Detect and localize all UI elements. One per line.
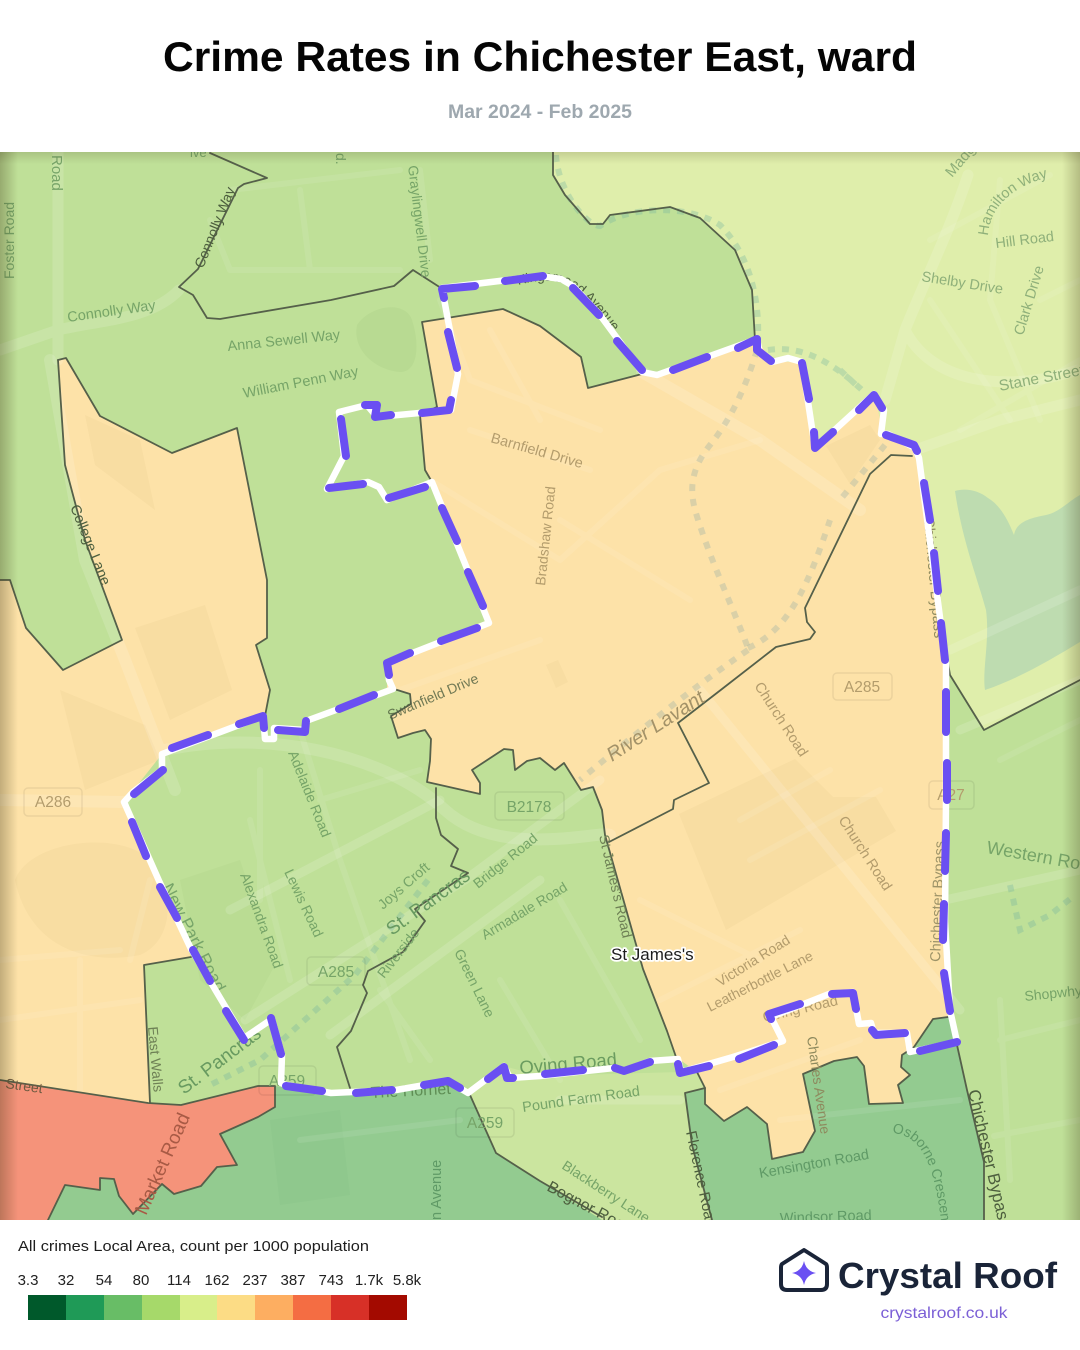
street labels: Chichester Bypass (964, 1088, 1014, 1230)
street labels: Kingsmead Avenue (518, 272, 618, 329)
subtitle: date range: Mar 2024 - Feb 2025 (448, 102, 632, 123)
website url: crystalroof.co.uk (880, 1305, 1009, 1322)
street labels: Alexandra Road (237, 871, 287, 970)
logo: Crystal Roof (781, 1250, 1058, 1322)
region: central and south-east orange area (387, 309, 948, 1159)
region: western orange area (0, 358, 270, 1103)
legend tick labels: 387 (280, 1272, 306, 1289)
street labels: Market Road (131, 1110, 195, 1218)
legend colour scale (28, 1295, 407, 1320)
region: south-central light green area (470, 1066, 712, 1220)
street labels: n Avenue (429, 1160, 445, 1220)
street labels: Connolly Way (66, 298, 157, 326)
street labels: Blackberry Lane (559, 1157, 653, 1226)
place label: St James's: St James's (611, 945, 694, 964)
icon: house with star (781, 1250, 827, 1290)
ward boundary: purple dashes (132, 276, 957, 1093)
road network (0, 152, 1080, 1100)
street labels: Clark Drive (1012, 264, 1048, 337)
street labels: d. (333, 153, 349, 165)
legend (18, 1238, 422, 1320)
street labels: Windsor Road (780, 1208, 872, 1227)
street labels: Shelby Drive (920, 269, 1004, 298)
dotted footpaths (210, 155, 1075, 1085)
road number shields (24, 673, 974, 1137)
road number shields: A259 (467, 1115, 503, 1132)
region: dark green south-east area (685, 1017, 984, 1220)
street labels: Swanfield Drive (385, 670, 481, 723)
legend tick labels: 3.3 (18, 1272, 38, 1289)
road number shields: A285 (844, 679, 880, 696)
street labels: Florence Road (682, 1129, 719, 1229)
legend tick labels: 237 (242, 1272, 268, 1289)
legend tick labels: 1.7k (355, 1272, 384, 1289)
street labels: Riverside (374, 925, 422, 981)
street labels: Oving Road (519, 1049, 618, 1078)
street labels: St. Pancras (174, 1023, 265, 1099)
road number shields: B2178 (507, 799, 551, 816)
legend tick labels: 743 (318, 1272, 344, 1289)
street labels: Pound Farm Road (521, 1084, 641, 1116)
legend tick labels: 114 (167, 1272, 191, 1289)
street labels: Oving Road (761, 993, 840, 1026)
street labels: Joys Croft (374, 859, 433, 912)
street labels: Armadale Road (478, 879, 570, 943)
street labels: Foster Road (1, 202, 17, 279)
region: red high-crime area (0, 1080, 275, 1220)
street labels: Green Lane (451, 946, 498, 1020)
map edge vignette (0, 152, 1080, 1220)
legend tick labels: 5.8k (393, 1272, 422, 1289)
street labels: Charles Avenue (804, 1035, 834, 1135)
street labels: Adelaide Road (285, 748, 334, 839)
region boundary lines (0, 152, 1080, 1220)
street labels: Leatherbottle Lane (704, 947, 816, 1015)
street labels: Connolly Way (191, 185, 238, 270)
street labels: Bridge Road (470, 830, 540, 891)
street labels: College Lane (66, 503, 113, 588)
street labels: Lewis Road (281, 867, 327, 940)
street labels: East Walls (145, 1026, 167, 1093)
street labels: New Park Road (158, 880, 229, 995)
street labels: The Hornet (370, 1081, 452, 1102)
ward boundary: white underlay (124, 276, 957, 1093)
legend tick labels: 54 (96, 1272, 112, 1289)
logo wordmark: Crystal Roof (838, 1255, 1058, 1296)
street labels: Chichester Bypass (928, 841, 948, 962)
street labels: Madgwick Lane (942, 90, 1022, 181)
street labels: ive (190, 145, 207, 160)
legend title: All crimes Local Area, count per 1000 population (18, 1238, 369, 1255)
road number shields: A285 (318, 964, 354, 981)
street labels: Bognor Road (544, 1179, 635, 1238)
street labels: Chichester Bypass (920, 517, 946, 639)
street labels: Hill Road (995, 229, 1055, 252)
street labels: Victoria Road (713, 932, 793, 990)
lake (955, 490, 1080, 690)
street labels: Graylingwell Drive (405, 164, 435, 279)
street labels: River Lavant (603, 686, 710, 766)
street labels: Hamilton Way (978, 170, 1046, 235)
street labels: Church Road (751, 679, 811, 760)
road number shields: A286 (35, 794, 71, 811)
street labels: Kensington Road (758, 1147, 870, 1182)
legend tick labels: 32 (58, 1272, 74, 1289)
building and park patches (15, 307, 896, 1205)
street labels: Barnfield Drive (489, 430, 585, 472)
road number shields: A259 (269, 1073, 305, 1090)
street labels: Osborne Crescent (894, 1124, 948, 1220)
street labels: Anna Sewell Way (227, 327, 342, 355)
street labels: Church Road (835, 813, 895, 894)
street labels: William Penn Way (242, 364, 360, 402)
legend tick labels: 80 (133, 1272, 149, 1289)
street labels: St. Pancras (383, 865, 474, 940)
region: dark green south area (48, 1081, 602, 1220)
street labels: St James's Road (596, 833, 635, 939)
street labels: Bradshaw Road (532, 486, 558, 586)
region: pale north-east area (553, 152, 1080, 730)
street labels: Street (5, 1075, 44, 1096)
legend tick labels (18, 1272, 422, 1289)
legend tick labels: 162 (204, 1272, 230, 1289)
road number shields: A27 (937, 787, 965, 804)
title: Crime Rates in Chichester East, ward (163, 33, 917, 80)
street labels: Road (48, 155, 65, 191)
